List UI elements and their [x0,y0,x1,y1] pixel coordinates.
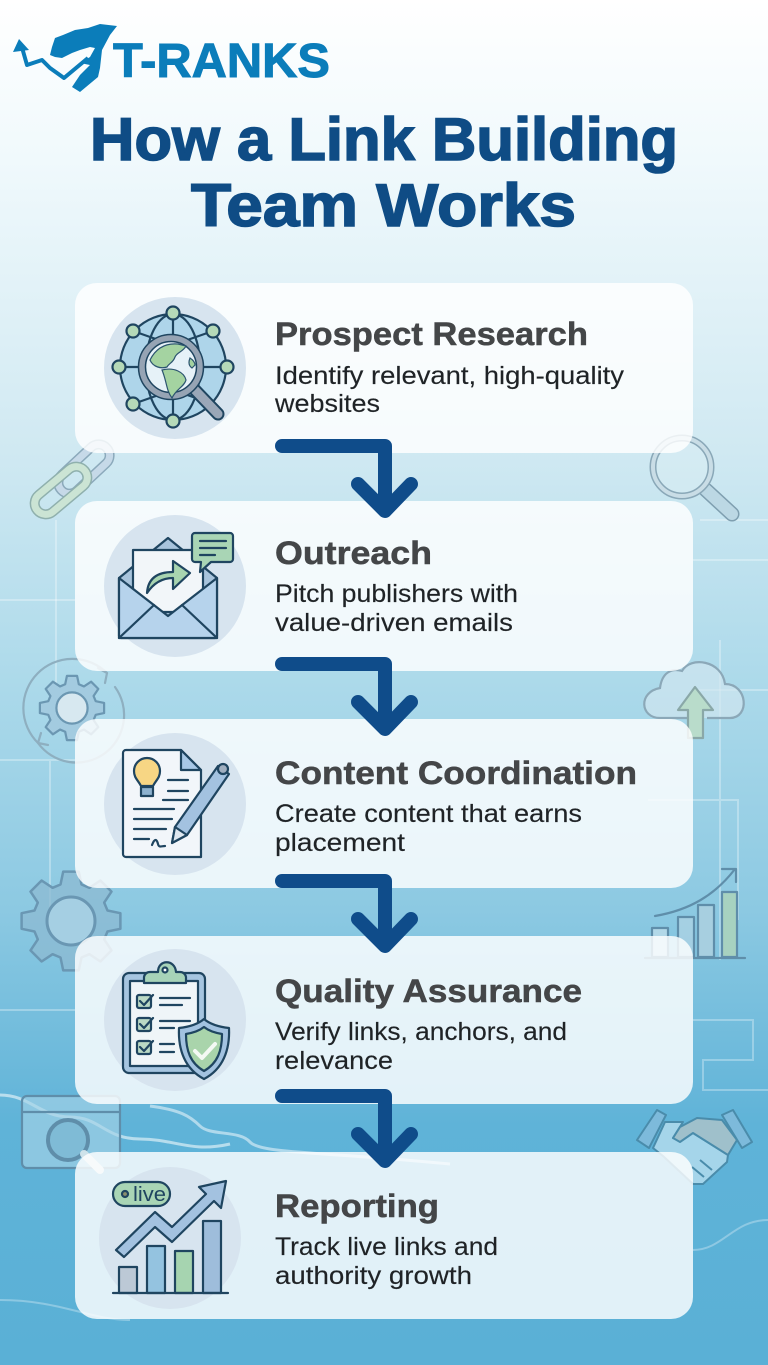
icon: browser search [22,1096,120,1170]
description [274,362,625,418]
description: Verify links, anchors, and [275,1018,567,1046]
icon: document with pen [104,733,246,875]
icon: handshake [637,1110,752,1184]
icon: growth chart [645,869,745,958]
description: placement [275,829,405,857]
description: authority growth [275,1262,472,1290]
description: relevance [275,1047,393,1075]
icon: chain link [30,440,114,519]
heading: Outreach [275,535,432,571]
title [90,106,678,239]
title: How a Link Building [90,106,678,173]
heading: Quality Assurance [275,973,582,1009]
arrow: step 3 to 4 [282,881,411,946]
description: Pitch publishers with [275,580,518,608]
logo [13,24,330,92]
icon: checklist with shield [104,949,246,1091]
description [275,1018,567,1075]
icon: live link growth chart: live [133,1184,166,1206]
description: Track live links and [275,1233,498,1261]
heading: Reporting [275,1188,439,1224]
icon: gear with cycle [23,659,124,763]
description [275,800,582,857]
arrow: step 2 to 3 [282,664,411,729]
logo icon: dinosaur and rising arrow [13,24,117,92]
arrow: step 4 to 5 [282,1096,411,1161]
arrow: step 1 to 2 [282,446,411,511]
icon: envelope with message [104,515,246,657]
description [275,1233,498,1290]
panel: content coordination [75,719,693,888]
icon: globe search [104,297,246,439]
heading: Content Coordination [275,755,637,791]
description [275,580,518,637]
icon: cloud upload [644,662,744,738]
logo wordmark: T-RANKS [113,35,330,88]
title: Team Works [191,172,576,239]
panel: quality assurance [75,936,693,1104]
description: Create content that earns [275,800,582,828]
description: websites [274,390,380,418]
panel: prospect research [75,283,693,453]
panel: reporting [75,1152,693,1319]
description: value-driven emails [275,609,513,637]
panel: outreach [75,501,693,671]
icon: live link growth chart [99,1167,241,1309]
heading: Prospect Research [275,316,588,352]
icon: magnifier [653,438,732,514]
icon: large gear [22,872,120,970]
description: Identify relevant, high-quality [275,362,625,390]
